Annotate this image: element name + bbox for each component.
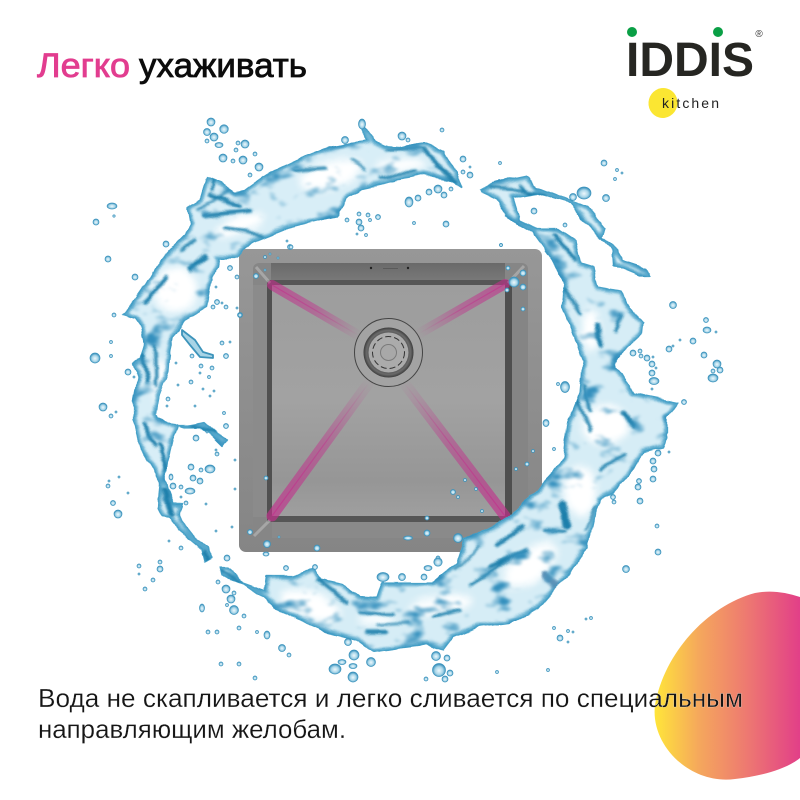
decorative gradient blob: [655, 592, 800, 780]
description text: [38, 683, 743, 744]
water splash: right and bottom arc: [220, 176, 678, 652]
sink inner frame: [253, 263, 528, 538]
water splash: upper left arc: [122, 122, 462, 562]
drain: [354, 318, 422, 386]
heading: Легко: [37, 47, 130, 85]
logo: IDDIS kitchen: [626, 27, 763, 121]
registered mark: ®: [755, 29, 763, 40]
description line 2: направляющим желобам.: [38, 714, 346, 744]
overflow slot: [370, 267, 409, 269]
heading second word: ухаживать: [139, 47, 307, 85]
pink drain channels: [272, 284, 505, 516]
logo yellow spot: [645, 85, 681, 121]
logo wordmark: IDDIS: [626, 34, 754, 87]
water droplets: [90, 118, 723, 682]
sink: [239, 249, 542, 552]
sink floor: [272, 285, 505, 516]
logo green dots: [627, 27, 723, 37]
logo subline: kitchen: [662, 95, 719, 111]
water splash: small branch: [182, 330, 213, 358]
sink corner creases: [254, 266, 524, 536]
sink rim: [239, 249, 542, 552]
description line 1: Вода не скапливается и легко сливается по специальным: [38, 683, 743, 713]
